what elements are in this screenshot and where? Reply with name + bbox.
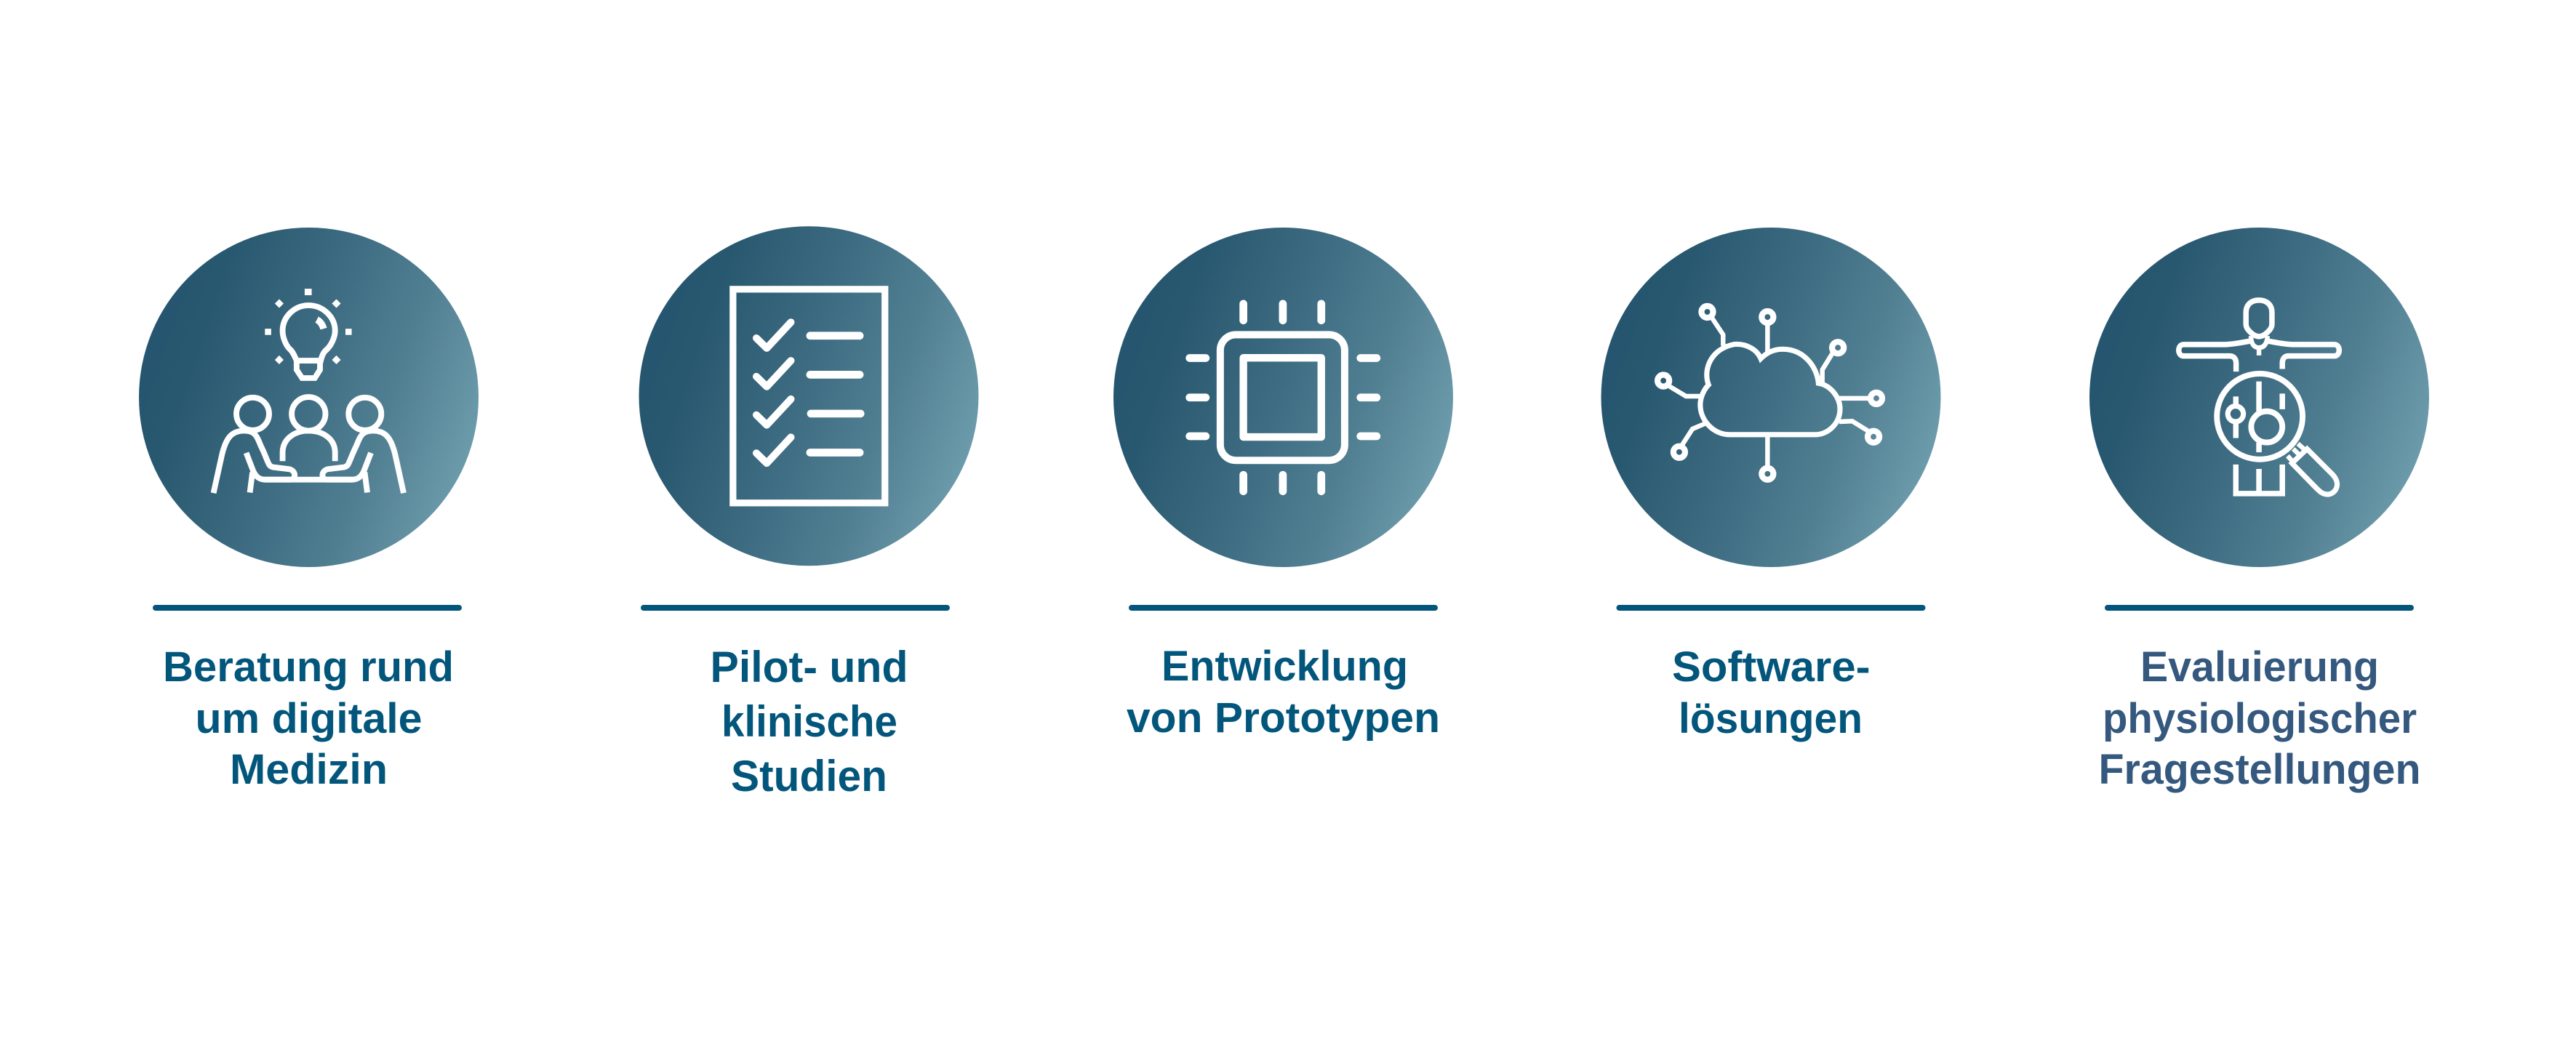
circle background [1601,228,1940,567]
divider line [1616,605,1926,611]
icon: checklist [733,289,885,503]
panel: Evaluierung physiologischer Fragestellungen [2089,228,2429,793]
icon: team meeting with light bulb [214,289,404,493]
label text: Medizin [230,746,388,793]
label text: Beratung rund [163,643,454,691]
label text: Evaluierung [2140,643,2379,691]
label text: Entwicklung [1161,643,1408,690]
label text: Pilot- und [710,643,908,691]
label text: von Prototypen [1127,694,1440,742]
label text: physiologischer [2103,695,2417,742]
circle background [2089,228,2429,567]
divider line [2105,605,2414,611]
divider line [153,605,462,611]
label text: klinische [721,697,897,746]
panel: Pilot- und klinische Studien [639,226,979,800]
panel: Softwarelösungen [1601,228,1940,742]
label text [2099,643,2420,793]
label text: lösungen [1679,695,1863,742]
icon: cloud network [1657,306,1882,480]
icon: human body with magnifying glass [2179,300,2339,494]
circle background [1113,228,1453,567]
divider line [641,605,950,611]
label text [1672,643,1871,742]
label text: Fragestellungen [2099,746,2420,793]
label text: Studien [731,752,887,800]
label text [710,643,908,800]
circle background [639,226,979,566]
divider line [1129,605,1438,611]
panel: Entwicklung von Prototypen [1113,228,1453,742]
circle background [139,228,479,567]
label text [1127,643,1440,742]
label text: Software- [1672,643,1871,691]
label text: um digitale [195,695,422,742]
icon: microchip [1190,304,1377,491]
label text [163,643,454,793]
panel: Beratung rund um digitale Medizin [139,228,479,793]
